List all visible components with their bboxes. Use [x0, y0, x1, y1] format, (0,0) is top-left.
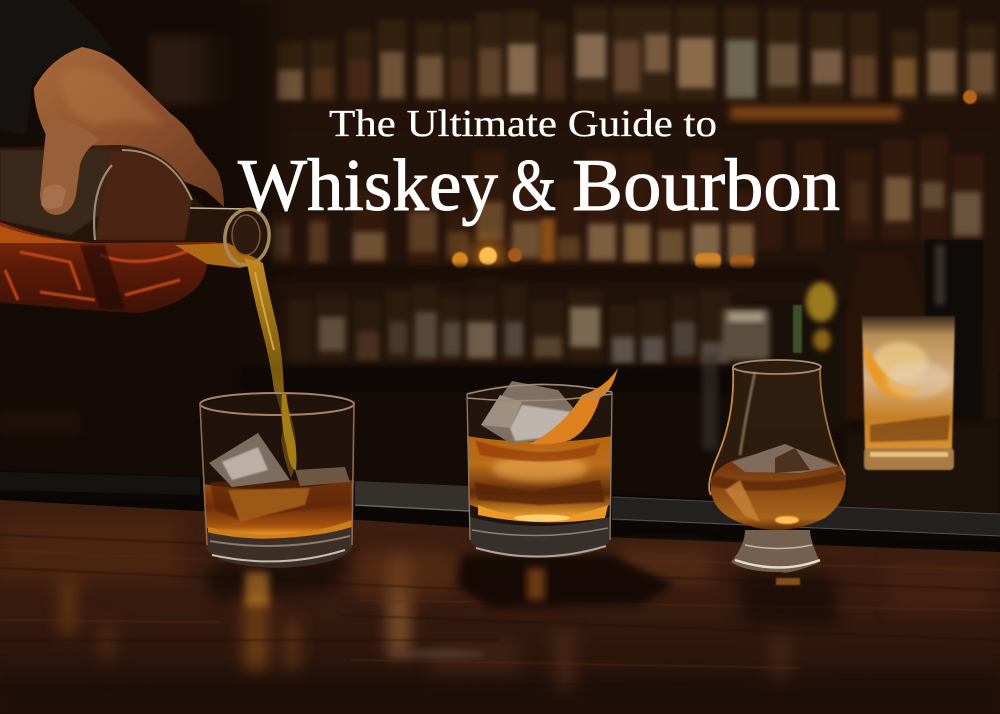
whiskey	[467, 436, 612, 518]
whiskey stream	[244, 258, 296, 478]
grain lines	[0, 535, 1000, 690]
tumbler glass	[200, 393, 354, 567]
ice	[732, 444, 838, 473]
title line 2: Bourbon	[572, 145, 840, 227]
tumbler glass	[467, 383, 612, 558]
title line 2	[238, 145, 840, 227]
middle bottle row	[270, 135, 984, 265]
whiskey in the bottle	[0, 222, 262, 313]
upper shelf	[255, 103, 1000, 125]
ice cube	[481, 381, 575, 443]
title line 2: &	[511, 145, 556, 227]
rear bar surface	[720, 420, 1000, 518]
ice cube	[209, 433, 290, 487]
lower shelf	[262, 266, 822, 280]
glass shadows	[205, 552, 350, 600]
wooden bar top	[0, 500, 1000, 714]
rubber bar mat	[0, 470, 1000, 552]
orange peel	[530, 368, 618, 444]
rim	[467, 384, 612, 401]
title	[238, 103, 840, 227]
rim	[200, 393, 354, 415]
glass body	[0, 145, 270, 313]
index finger in front of the bottle	[40, 118, 100, 215]
right back bar objects	[702, 240, 1000, 450]
glass base	[470, 517, 610, 558]
foot	[731, 530, 820, 573]
pouring bottle	[0, 145, 273, 313]
title line 1: The Ultimate Guide to	[329, 103, 717, 145]
glass base	[206, 527, 352, 568]
back of hand	[34, 47, 224, 207]
top bottle row	[276, 6, 996, 104]
lower bottle row	[288, 285, 730, 367]
whiskey	[203, 480, 354, 535]
bowl	[711, 361, 843, 530]
whiskey	[711, 453, 846, 530]
wood reflections	[0, 520, 1000, 714]
blurred highball glass	[862, 316, 955, 470]
warm shelf glows	[452, 90, 977, 273]
old fashioned glass	[467, 368, 618, 558]
hand behind the bottle	[0, 0, 224, 207]
shelves of blurred bottles	[205, 0, 1000, 390]
rocks glass being poured	[200, 392, 354, 568]
dark fade on left of the shelves	[205, 0, 275, 390]
title line 2: Whiskey	[238, 145, 498, 227]
sleeve	[0, 0, 112, 135]
glencairn tasting glass	[709, 360, 846, 573]
glass highlights	[740, 372, 755, 455]
bottle neck and lip	[190, 208, 248, 209]
base of shelving	[240, 366, 740, 392]
